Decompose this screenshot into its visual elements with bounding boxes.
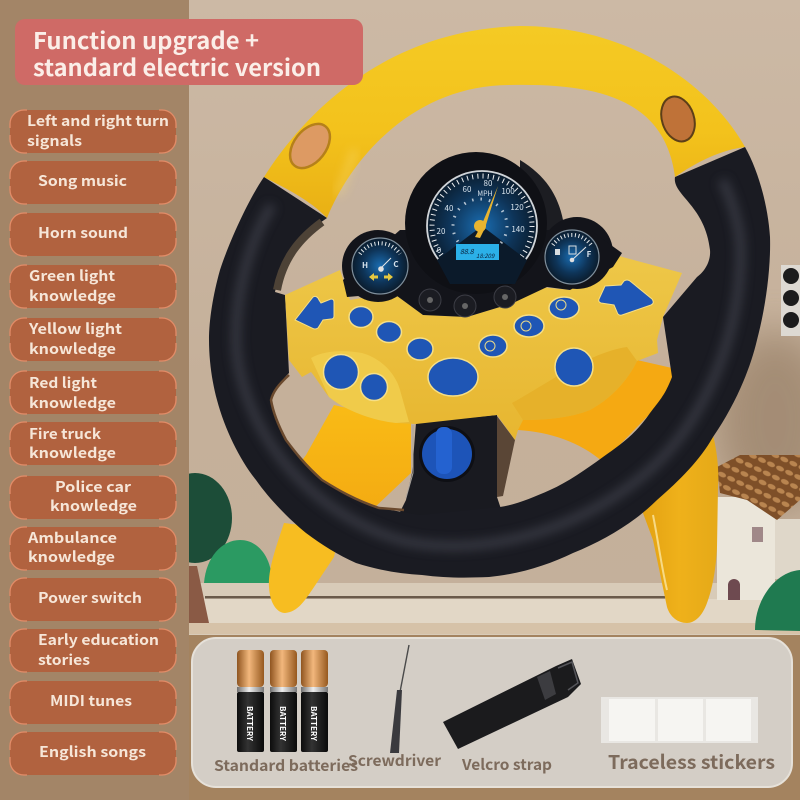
- speedometer dial: 40: [445, 203, 454, 214]
- icon: batteries: BATTERY: [277, 706, 288, 741]
- needle: [475, 186, 498, 238]
- icon: velcro strap: [443, 659, 581, 749]
- left brown column: [0, 0, 189, 800]
- feature: police car: [10, 476, 176, 519]
- feature: early education: [10, 629, 176, 672]
- three black dots under speedometer: [419, 286, 516, 317]
- speedometer dial: 100: [501, 186, 515, 197]
- label: standard batteries: Standard batteries: [214, 755, 358, 776]
- left leg lower: [269, 523, 340, 613]
- feature: early education: stories: [38, 649, 90, 670]
- speedometer dial: 20: [437, 226, 446, 237]
- spoke silver edge: [406, 425, 413, 498]
- feature: turn signals: Left and right turn: [27, 110, 169, 131]
- button letters: [485, 300, 566, 351]
- panel right recess: [512, 347, 637, 420]
- LCD display: 88.8: [460, 247, 475, 257]
- spoke brown side: [497, 416, 515, 497]
- rim sheen: [236, 180, 740, 546]
- center black spoke: [396, 415, 503, 520]
- scene: green ball right: [755, 570, 800, 631]
- feature: turn signals: [10, 110, 176, 153]
- title banner: standard electric version: [33, 49, 321, 83]
- feature: green light: Green light: [29, 265, 115, 286]
- feature: yellow light: knowledge: [29, 338, 116, 359]
- power knob: [419, 426, 475, 482]
- rim hole edge: [271, 375, 404, 510]
- panel left recess: [311, 351, 409, 423]
- speedometer dial: 120: [510, 202, 524, 213]
- bottom brown band: [189, 635, 800, 800]
- left arrow button: [295, 296, 334, 329]
- icon: batteries: BATTERY: [308, 706, 319, 741]
- left gauge: H: [362, 260, 368, 271]
- feature: green light: [10, 265, 176, 308]
- feature: ambulance: Ambulance: [27, 527, 117, 548]
- speedometer housing: [405, 152, 547, 294]
- icon: batteries: [237, 650, 328, 752]
- label: velcro strap: Velcro strap: [461, 754, 552, 775]
- yellow top arc: [264, 26, 745, 218]
- scene: tree left: [158, 473, 232, 623]
- small buttons row: [349, 297, 579, 360]
- leg highlight: [653, 515, 667, 590]
- feature: fire truck: Fire truck: [29, 423, 101, 444]
- speedometer dial: 140: [511, 224, 525, 235]
- table surface: [189, 583, 800, 637]
- feature: fire truck: [10, 422, 176, 465]
- icon: screwdriver: [390, 645, 409, 753]
- LCD display: 18:209: [476, 251, 495, 260]
- feature: midi tunes: MIDI tunes: [50, 690, 132, 711]
- large buttons: [324, 348, 593, 400]
- feature: fire truck: knowledge: [29, 442, 116, 463]
- feature: power switch: [10, 578, 176, 621]
- feature: red light: [10, 371, 176, 414]
- scene: green mound: [204, 540, 272, 583]
- left gauge: [352, 238, 408, 294]
- steering wheel toy: [209, 26, 770, 623]
- feature: english songs: [10, 732, 176, 775]
- speedometer dial: 0: [437, 245, 442, 256]
- right amber lens: [656, 92, 700, 146]
- feature: police car: knowledge: [50, 495, 137, 516]
- panel: accessories: [192, 638, 792, 787]
- feature: red light: Red light: [29, 372, 97, 393]
- title banner: [15, 19, 363, 85]
- feature list: [10, 110, 176, 775]
- scene: house right: [717, 455, 800, 600]
- right gauge: F: [587, 249, 592, 260]
- feature: horn sound: Horn sound: [38, 222, 128, 243]
- speedometer dial: [427, 171, 537, 284]
- background wall: [0, 0, 800, 640]
- title banner: Function upgrade +: [33, 22, 259, 56]
- feature: police car: Police car: [55, 476, 132, 497]
- left leg upper: [295, 405, 411, 510]
- feature: early education: Early education: [38, 629, 159, 650]
- label: screwdriver: Screwdriver: [348, 750, 441, 771]
- right gauge: [545, 230, 599, 284]
- right leg lower: [640, 435, 718, 623]
- feature: midi tunes: [10, 681, 176, 724]
- feature: turn signals: signals: [27, 130, 82, 151]
- right leg upper: [505, 360, 678, 462]
- left gauge: C: [393, 259, 399, 270]
- speedometer dial: 60: [463, 184, 472, 195]
- LCD display: [456, 244, 499, 260]
- feature: horn sound: [10, 213, 176, 256]
- feature: song music: Song music: [38, 170, 127, 191]
- right arrow button: [599, 280, 653, 315]
- feature: english songs: English songs: [39, 741, 146, 762]
- feature: song music: [10, 161, 176, 204]
- feature: power switch: Power switch: [38, 587, 142, 608]
- icon: batteries: BATTERY: [244, 706, 255, 741]
- left amber lens: [282, 116, 338, 176]
- icon: traceless stickers: [601, 697, 758, 743]
- speedometer dial: 80: [484, 178, 493, 189]
- feature: yellow light: [10, 318, 176, 361]
- speedometer right shoulder: [520, 160, 563, 240]
- speedometer dial: MPH: [477, 189, 493, 199]
- feature: ambulance: [10, 527, 176, 570]
- feature: green light: knowledge: [29, 285, 116, 306]
- blue buttons: [295, 280, 653, 400]
- feature: red light: knowledge: [29, 392, 116, 413]
- black wheel rim: [209, 147, 770, 578]
- cluster housing: [342, 217, 622, 317]
- arc inner light patch: [338, 150, 355, 195]
- label: traceless stickers: Traceless stickers: [608, 748, 775, 775]
- yellow control panel: [285, 255, 682, 440]
- scene: small toy blocks right: [781, 265, 800, 336]
- wall shadow right: [715, 330, 800, 510]
- panel background: [192, 638, 792, 787]
- gauge cluster: [342, 152, 622, 317]
- feature: ambulance: knowledge: [28, 546, 115, 567]
- feature: yellow light: Yellow light: [28, 318, 122, 339]
- rim brown reflection: [277, 222, 322, 290]
